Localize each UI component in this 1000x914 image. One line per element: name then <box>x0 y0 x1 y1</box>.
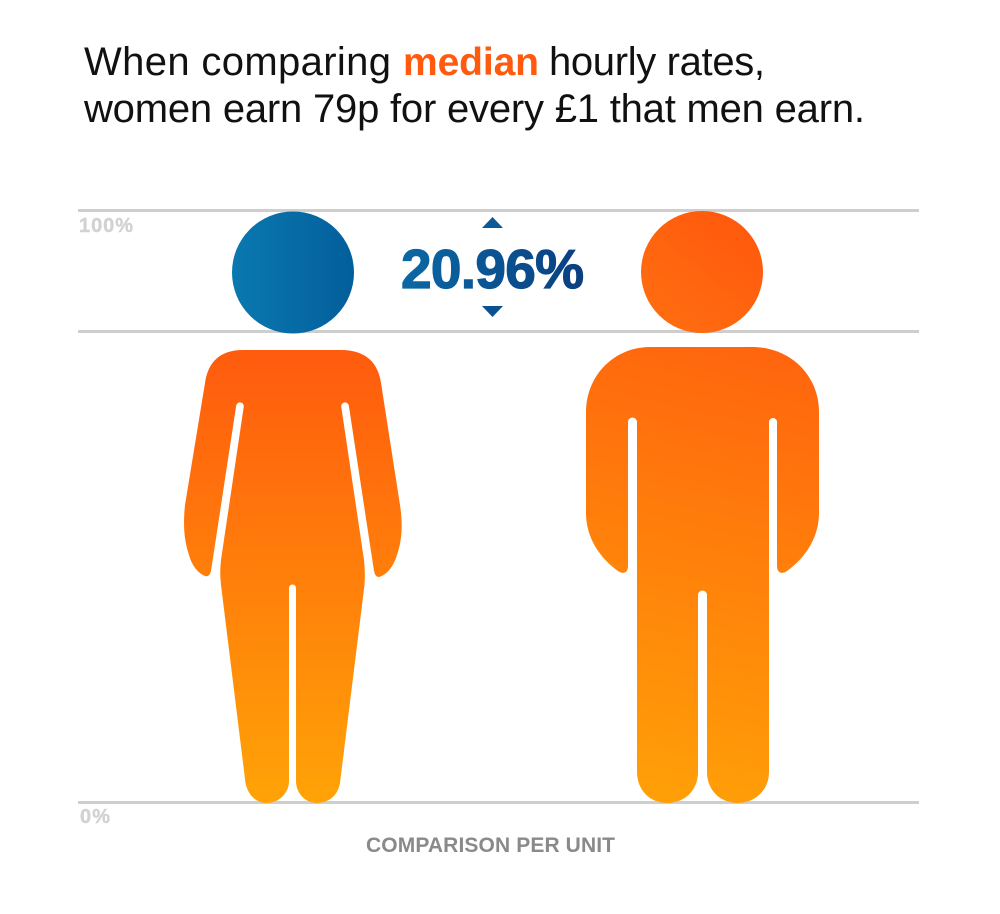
woman figure <box>184 212 402 803</box>
woman body <box>184 350 402 803</box>
woman head <box>232 212 354 334</box>
icon: up arrow <box>482 217 503 228</box>
title: median <box>403 41 539 84</box>
axis label: 100%: 100% <box>79 215 133 237</box>
man body <box>586 347 819 803</box>
title <box>83 40 865 131</box>
title: hourly rates, <box>549 40 765 84</box>
man head <box>641 211 763 333</box>
icon: down arrow <box>482 306 503 317</box>
chart gridlines <box>78 209 919 804</box>
axis caption: COMPARISON PER UNIT <box>366 834 615 857</box>
difference callout <box>401 217 584 317</box>
percentage value: 20.96% <box>401 238 584 300</box>
man figure <box>586 211 819 803</box>
title: women earn 79p for every £1 that men earn. <box>83 87 865 131</box>
axis label: 0%: 0% <box>80 806 110 828</box>
title: When comparing <box>84 40 391 84</box>
